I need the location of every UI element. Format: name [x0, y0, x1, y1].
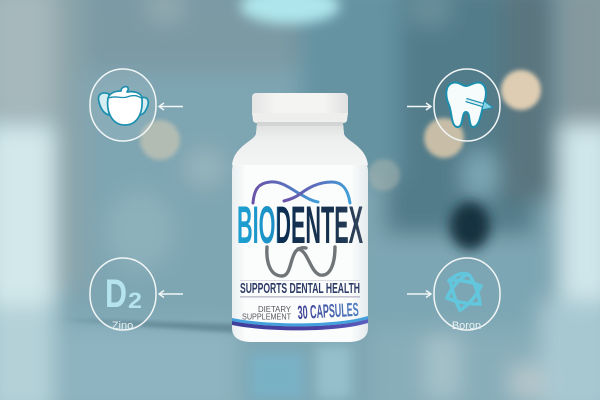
bottle cap — [252, 93, 348, 117]
dietary supplement label — [242, 304, 292, 322]
arrow pointing right — [407, 290, 431, 298]
ceiling light and dark doorway — [240, 0, 490, 250]
product bottle: 30 CAPSULES — [297, 300, 359, 324]
top left callout — [90, 69, 183, 141]
callout ring — [90, 69, 156, 141]
label: Boron: Boron — [452, 320, 481, 332]
bottle shoulder shade — [232, 124, 368, 165]
top right callout — [407, 69, 500, 141]
callout ring — [434, 69, 500, 141]
cap collar — [252, 113, 348, 123]
icon: star knot — [447, 273, 481, 310]
bottle colour band — [232, 316, 368, 326]
bottle shadow on floor — [60, 319, 236, 333]
bottom right callout — [407, 258, 500, 332]
dietary supplement label: DIETARY — [258, 304, 291, 314]
arrow pointing right — [407, 103, 431, 110]
icon: tooth with arrow — [446, 83, 493, 127]
icon: tooth cup — [98, 87, 148, 125]
bottom left callout — [90, 258, 183, 332]
bottle body — [232, 124, 368, 342]
callout ring — [434, 258, 500, 330]
label: Zino: Zino — [112, 320, 133, 332]
bottle reflection — [250, 345, 352, 400]
tagline — [240, 280, 360, 297]
tagline: SUPPORTS DENTAL HEALTH — [240, 280, 360, 297]
bokeh lights — [140, 70, 541, 191]
arrow pointing left — [159, 103, 183, 110]
icon: D2: D — [105, 272, 127, 316]
arrow pointing left — [159, 290, 183, 298]
icon: D2: 2 — [128, 288, 142, 313]
callout ring — [90, 258, 156, 330]
neck ring — [257, 122, 343, 126]
tooth crown logo — [253, 182, 350, 203]
product bottle — [232, 93, 368, 342]
dietary supplement label: SUPPLEMENT — [242, 312, 292, 322]
tooth roots logo — [267, 247, 335, 276]
text: BIODENTEX — [237, 196, 363, 255]
